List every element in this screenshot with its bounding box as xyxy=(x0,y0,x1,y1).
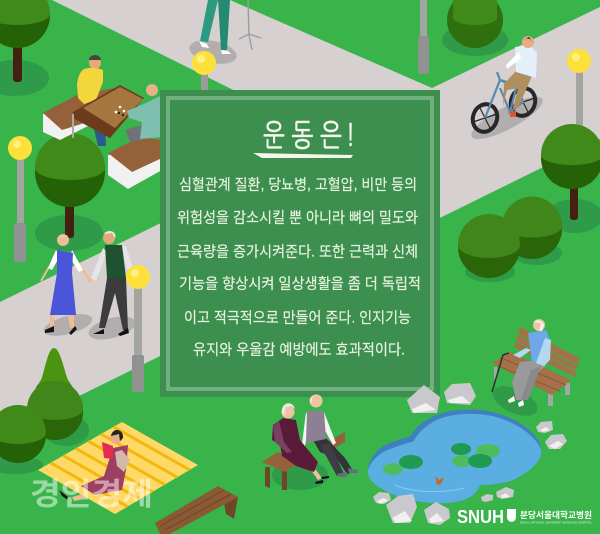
right bench xyxy=(108,137,162,189)
left bench xyxy=(43,88,115,140)
couple holding hands xyxy=(41,231,138,344)
lamp: left xyxy=(8,136,32,262)
bushes: right xyxy=(458,197,562,282)
bench xyxy=(492,327,579,406)
woman in blue dress xyxy=(41,234,90,335)
panel body text: 심혈관계 질환, 당뇨병, 고혈압, 비만 등의 xyxy=(179,176,417,194)
lamp: top xyxy=(418,0,429,74)
older man in teal shirt xyxy=(125,84,162,142)
man in grey vest xyxy=(302,394,358,477)
panel body text: 이고 적극적으로 만들어 준다. 인지기능 xyxy=(184,310,411,326)
panel body text xyxy=(177,176,421,358)
go players at table xyxy=(43,55,162,189)
panel: exercise text xyxy=(160,90,440,397)
woman in maroon xyxy=(272,403,329,484)
elderly man on bench with cane xyxy=(488,319,579,422)
tree: top left xyxy=(0,0,50,96)
lamp: centre top xyxy=(192,51,216,92)
icon: hospital shield xyxy=(507,509,516,522)
picnic mat xyxy=(38,422,198,514)
seated elderly couple on bench xyxy=(262,394,358,490)
bench xyxy=(262,432,345,490)
panel heading: 운동은! xyxy=(263,120,355,151)
hospital logo xyxy=(457,507,592,527)
bush: top right xyxy=(442,0,508,56)
go table xyxy=(72,85,144,138)
hospital logo: SEOUL NATIONAL UNIVERSITY BUNDANG HOSPITAL xyxy=(520,520,592,524)
woman reading on mat xyxy=(59,430,130,501)
man in yellow shirt xyxy=(77,55,106,146)
koi xyxy=(435,476,444,485)
tree: right xyxy=(541,124,600,233)
pond rocks xyxy=(373,383,567,525)
man xyxy=(492,319,551,407)
panel body text: 근육량을 증가시켜준다. 또한 근력과 신체 xyxy=(177,244,418,260)
panel body text: 기능을 향상시켜 일상생활을 좀 더 독립적 xyxy=(179,276,421,292)
pond xyxy=(368,410,541,503)
cyclist xyxy=(467,36,547,146)
man in green vest xyxy=(88,231,133,336)
walker with IV stand xyxy=(187,0,261,68)
panel body text: 유지와 우울감 예방에도 효과적이다. xyxy=(193,342,405,358)
hospital logo: SNUH xyxy=(457,507,504,527)
lamp: left lower xyxy=(126,265,150,392)
watermark: 경인경제 xyxy=(30,477,153,512)
panel body text: 위험성을 감소시킬 뿐 아니라 뼈의 밀도와 xyxy=(177,210,418,226)
hospital logo: 분당서울대학교병원 xyxy=(520,510,592,520)
tree: left centre xyxy=(35,133,105,251)
bench: bottom xyxy=(155,486,238,534)
lamp: right xyxy=(567,49,591,133)
bushes and cone tree: bottom left xyxy=(0,348,89,474)
lily pads xyxy=(383,443,500,475)
